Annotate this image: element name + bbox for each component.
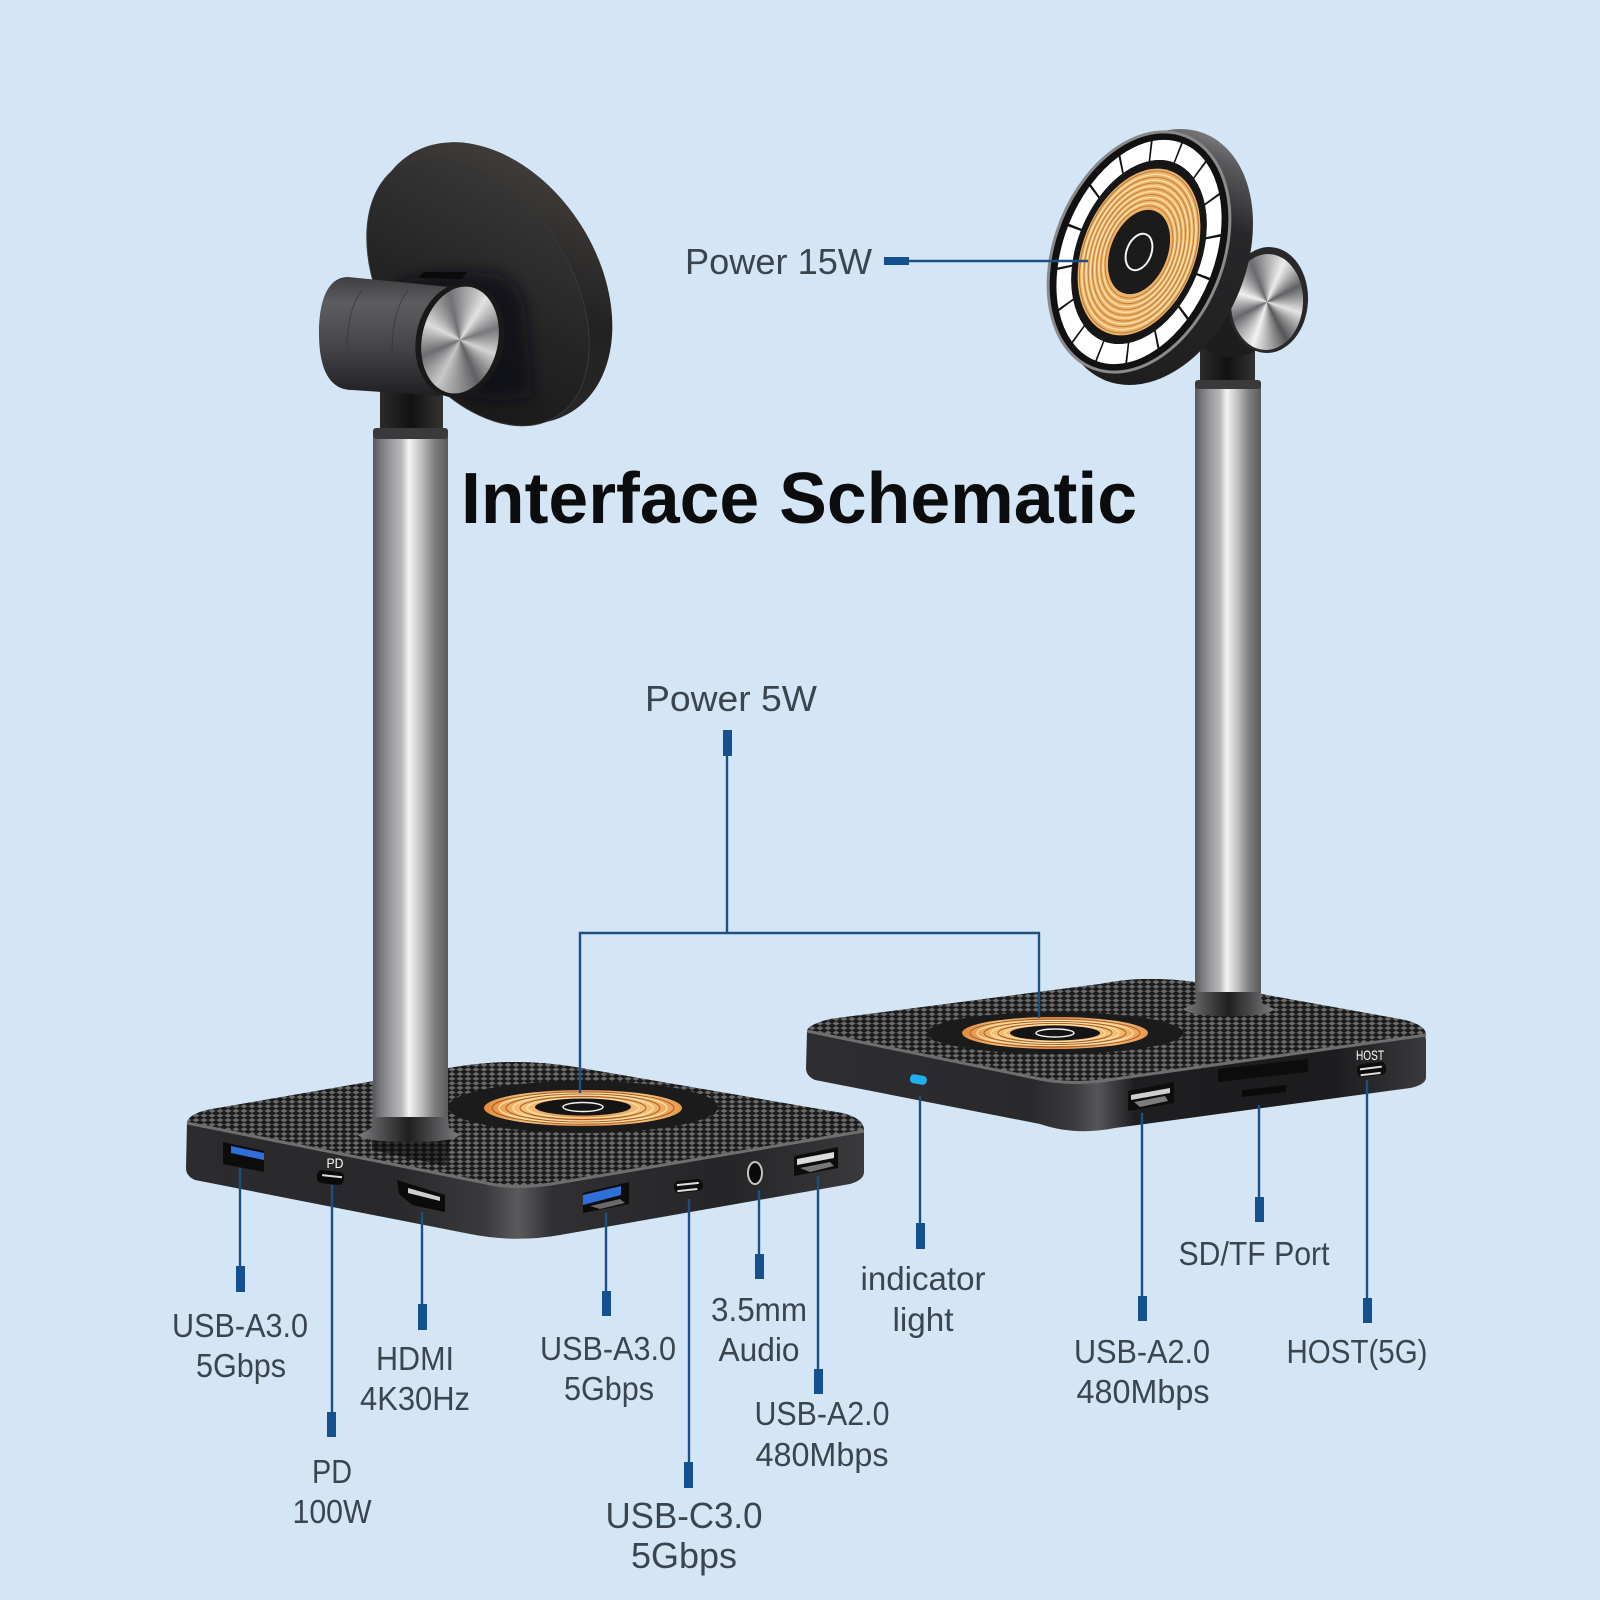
right wireless coil (927, 1012, 1183, 1054)
left magnetic disc (320, 97, 662, 469)
callout: HOST(5G): HOST(5G) (1286, 1333, 1428, 1370)
USB-A3.0 port left (223, 1142, 264, 1172)
right base (806, 960, 1426, 1131)
callout: Power 5W: Power 5W (645, 678, 817, 719)
callout: USB-A3.0 second (540, 1213, 676, 1407)
USB-A3.0 port right (583, 1182, 629, 1213)
callout: USB-A2.0 right: 480Mbps (1076, 1373, 1210, 1410)
callout: Power 5W (580, 678, 1039, 1093)
left wireless coil (448, 1081, 718, 1133)
callout: USB-C3.0: 5Gbps (631, 1535, 737, 1576)
callout: SD/TF Port: SD/TF Port (1178, 1235, 1330, 1272)
callout: HDMI (360, 1212, 470, 1417)
callout: indicator light: light (892, 1301, 954, 1338)
HOST port (1356, 1061, 1387, 1078)
TF slot (1242, 1085, 1286, 1097)
right metal knob (1225, 245, 1311, 355)
callout: 3.5mm Audio: 3.5mm (711, 1291, 807, 1328)
white ring segments (1035, 128, 1243, 376)
callout: USB-C3.0: USB-C3.0 (606, 1495, 762, 1536)
coil centre (1096, 201, 1182, 303)
right carbon fibre top (807, 979, 1426, 1082)
callout: PD 100W (292, 1185, 372, 1530)
right pole over base (1195, 960, 1261, 993)
callout: SD/TF Port (1178, 1105, 1330, 1272)
left metal knob (410, 278, 510, 402)
callout: USB-A2.0: 480Mbps (756, 1436, 888, 1473)
USB-C port (673, 1178, 704, 1193)
left carbon fibre top (187, 1062, 864, 1186)
right hinge shadow (1192, 293, 1272, 357)
right magnetic charger disc (1014, 100, 1289, 414)
callout: USB-A3.0 second: 5Gbps (564, 1370, 654, 1407)
callout: HDMI: 4K30Hz (360, 1380, 470, 1417)
USB-A2.0 port (794, 1147, 838, 1176)
left pole reflection (372, 1140, 450, 1166)
right pole collar (1183, 992, 1274, 1016)
left hinge cylinder (319, 274, 515, 406)
HDMI port (397, 1180, 445, 1212)
callout: USB-A3.0 left: USB-A3.0 (172, 1307, 308, 1344)
left pole collar (358, 1117, 459, 1142)
callout: PD 100W: PD (312, 1453, 352, 1490)
callout: Power 15W: Power 15W (685, 241, 872, 282)
callout: 3.5mm Audio: Audio (718, 1331, 800, 1368)
audio jack (748, 1162, 762, 1184)
callout: PD 100W: 100W (292, 1493, 372, 1530)
callout: USB-A2.0 (754, 1176, 890, 1473)
callout: USB-A2.0: USB-A2.0 (754, 1395, 890, 1432)
callout: USB-A2.0 right: USB-A2.0 (1074, 1333, 1210, 1370)
callout: indicator light (860, 1096, 986, 1338)
HOST label: HOST (1356, 1047, 1384, 1063)
callout: HOST(5G) (1286, 1080, 1428, 1370)
SD slot (1218, 1059, 1308, 1082)
callout: USB-C3.0 (606, 1199, 762, 1576)
left base (186, 1060, 864, 1239)
callout: USB-A3.0 left: 5Gbps (196, 1347, 286, 1384)
callout: USB-A3.0 left (172, 1168, 308, 1384)
right base rim highlight (807, 1031, 1426, 1082)
callout: HDMI: HDMI (376, 1340, 454, 1377)
right USB-A port (1128, 1082, 1174, 1111)
PD port (316, 1170, 345, 1185)
indicator LED (909, 1074, 928, 1085)
copper coil (1046, 140, 1232, 364)
callout: 3.5mm Audio (711, 1190, 807, 1368)
left stand back view (319, 97, 662, 469)
callout: indicator light: indicator (860, 1260, 986, 1297)
callout: USB-A2.0 right (1074, 1113, 1210, 1410)
right pole (1195, 380, 1261, 995)
left base rim highlight (187, 1123, 864, 1186)
left pole over base (373, 1060, 448, 1118)
PD label: PD (326, 1155, 344, 1171)
callout: Power 15W (685, 241, 1088, 282)
title: Interface Schematic (461, 459, 1137, 539)
left pole (373, 428, 448, 1119)
right back neck (1200, 340, 1255, 388)
left neck (380, 385, 443, 435)
right stand back parts (1192, 245, 1311, 388)
callout: USB-A3.0 second: USB-A3.0 (540, 1330, 676, 1367)
